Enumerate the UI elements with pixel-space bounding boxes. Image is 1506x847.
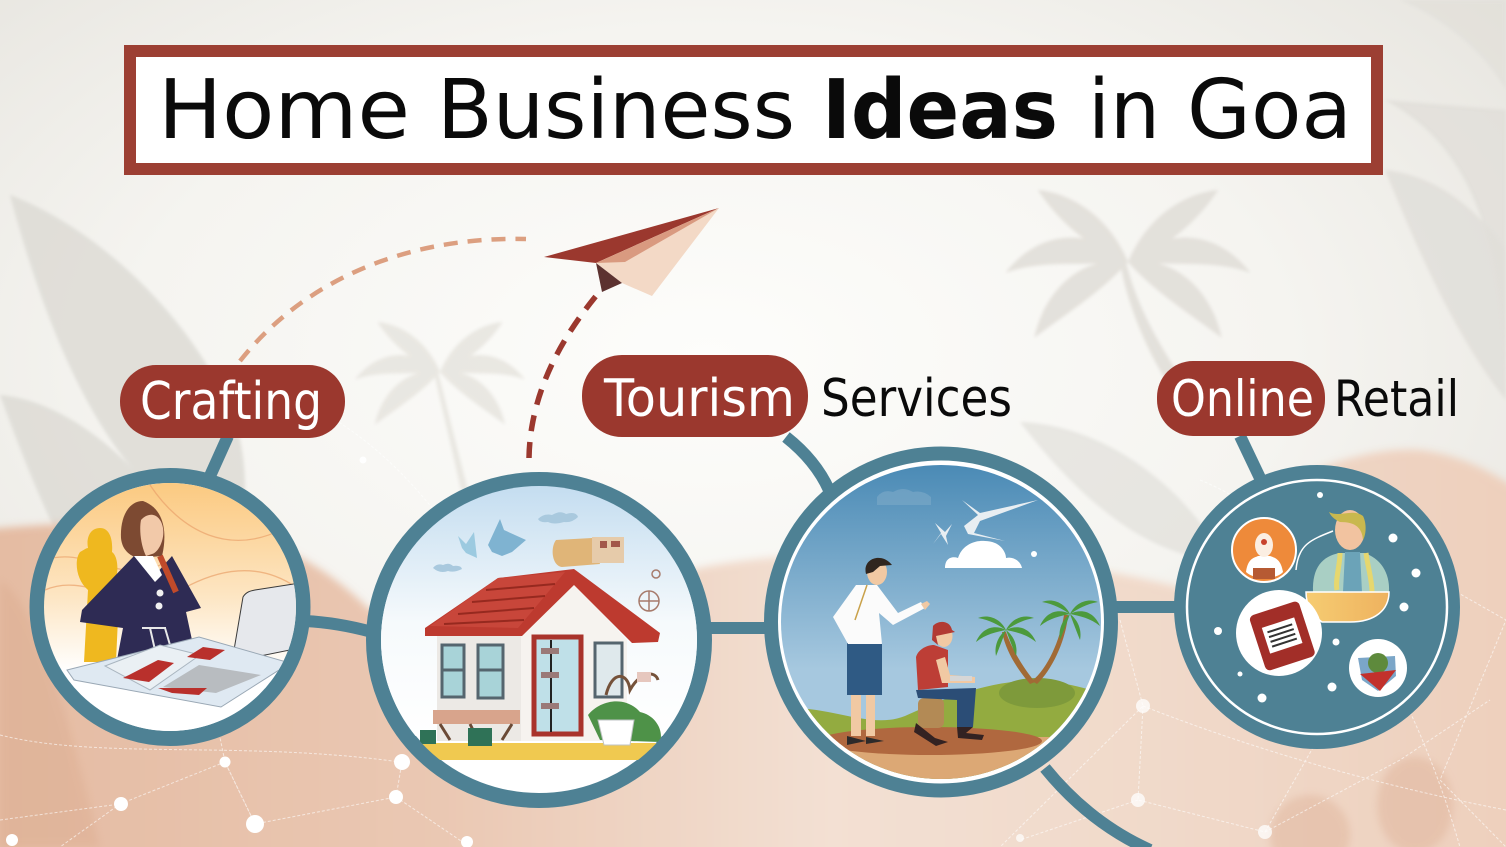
title: Business	[437, 63, 795, 158]
icon: cloud	[945, 541, 1022, 568]
label: Crafting: Crafting	[140, 372, 322, 432]
icon: seated man	[914, 622, 984, 746]
icon: scattered dots	[1214, 492, 1420, 702]
panel: home business circle	[374, 480, 704, 800]
ground	[410, 743, 670, 760]
label: Online Retail: Retail	[1334, 370, 1459, 428]
dashed arc: red	[529, 296, 596, 458]
icon: monitor	[234, 584, 296, 656]
icon: woman	[80, 501, 201, 665]
icon: yellow dress form	[77, 528, 118, 662]
icon: plant	[588, 672, 661, 745]
icon: house	[425, 569, 660, 741]
connector lines	[210, 436, 1260, 847]
title: Goa	[1187, 63, 1352, 158]
decorative palm: centre	[355, 322, 525, 490]
icon: paper plane	[544, 208, 719, 296]
label: Online Retail	[1157, 361, 1459, 436]
panel: tourism circle	[771, 454, 1111, 790]
icon: small avatar	[1349, 639, 1407, 697]
label: Online Retail: Online	[1171, 370, 1314, 428]
panel: crafting circle	[37, 476, 303, 738]
decorative palm: right	[1006, 190, 1250, 425]
icon: standing man	[833, 558, 930, 745]
title: Home	[158, 63, 410, 158]
title: Ideas	[822, 63, 1058, 158]
icon: plane and birds	[933, 500, 1038, 545]
icon: parcels	[553, 537, 624, 567]
hills and ground	[808, 678, 1086, 779]
network nodes	[6, 456, 1272, 847]
label: Tourism Services: Services	[821, 369, 1012, 429]
icon: red document	[1236, 590, 1322, 676]
network lines	[0, 400, 1506, 847]
table with fabric	[67, 637, 290, 707]
icon: clouds and origami	[433, 512, 578, 572]
icon: orange avatar	[1232, 518, 1296, 582]
icon: wheel	[639, 570, 660, 611]
title	[130, 51, 1377, 169]
icon: person with bowl	[1306, 510, 1389, 622]
darker sand shapes	[0, 580, 1453, 847]
panel: online retail circle	[1174, 465, 1460, 749]
dashed arc: peach	[240, 239, 526, 361]
label: Tourism Services: Tourism	[603, 369, 795, 429]
icon: palm trees	[976, 600, 1100, 684]
decorative palm leaves	[0, 0, 1506, 560]
icon: connector	[1296, 531, 1333, 570]
label: Tourism Services	[582, 355, 1012, 437]
sand hills	[0, 450, 1506, 847]
icon: bench	[420, 710, 520, 746]
title: in	[1088, 63, 1160, 158]
